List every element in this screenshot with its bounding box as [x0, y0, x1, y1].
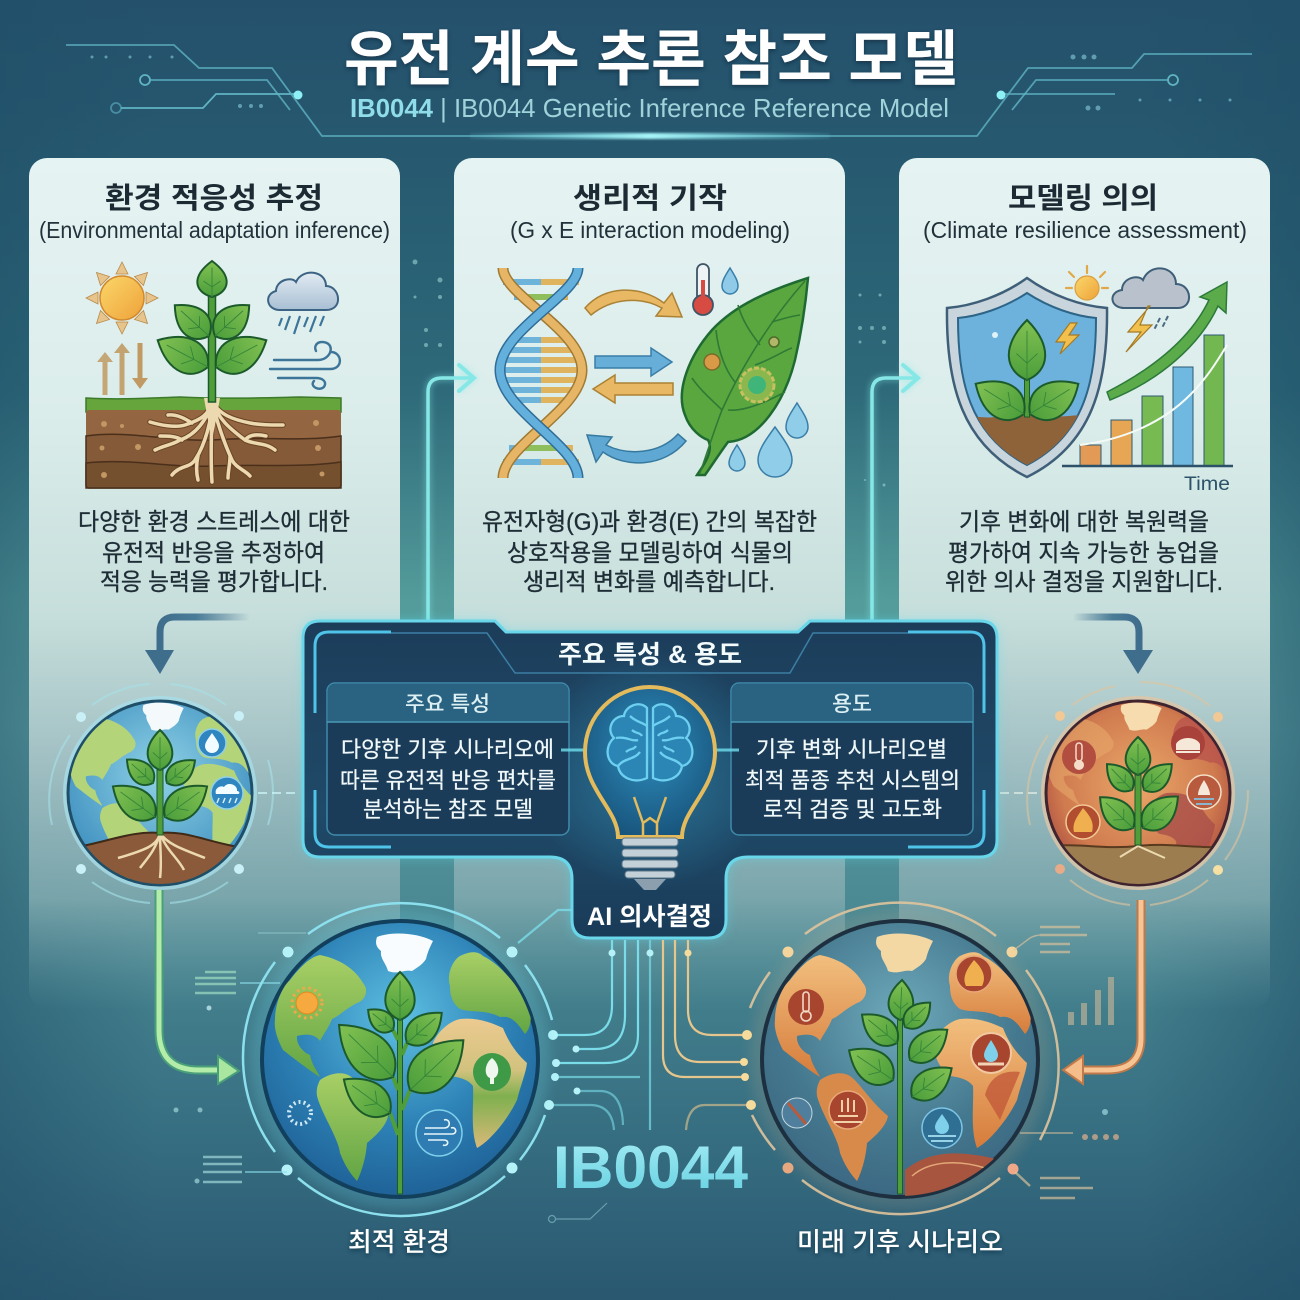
icon: flame badge	[1066, 805, 1100, 839]
body text: modeling significance: 위한 의사 결정을 지원합니다.	[945, 569, 1223, 596]
arrow: core panel up to significance panel	[872, 365, 918, 622]
arrow: right blue	[595, 348, 672, 376]
title: 유전 계수 추론 참조 모델	[344, 26, 958, 93]
decorative side data: optimal globe	[174, 933, 607, 1222]
label: optimal environment: 최적 환경	[348, 1227, 450, 1257]
large globe: future climate	[750, 903, 1059, 1214]
icon: water level badge	[922, 1108, 962, 1148]
arrow: gene to environment curve	[585, 290, 682, 317]
panel heading: environmental adaptation: 환경 적응성 추정	[105, 182, 323, 215]
icon: data dots	[289, 1102, 311, 1124]
icon: water drop badge	[198, 729, 226, 757]
icon: light bulb with brain	[585, 687, 715, 890]
panel subheading: modeling significance: (Climate resilience assessment)	[923, 217, 1247, 243]
body text: environmental adaptation: 유전적 반응을 추정하여	[102, 540, 325, 567]
icon: sun small	[1066, 266, 1108, 300]
icon: drought badge	[1171, 726, 1205, 760]
icon: leaf with pathogen spots	[682, 278, 808, 475]
arrow: adaptation panel down to small globe	[145, 617, 250, 674]
body text: environmental adaptation	[78, 509, 350, 596]
body text: modeling significance	[945, 509, 1223, 596]
icon: flame badge	[956, 956, 992, 992]
box text: use: 최적 품종 추천 시스템의	[745, 768, 960, 793]
box: use	[731, 683, 973, 835]
link: small globe to core panel left	[258, 792, 300, 794]
icon: forest badge	[473, 1053, 511, 1091]
icon: storm cloud	[1112, 268, 1189, 352]
body text: physiological mechanism: 생리적 변화를 예측합니다.	[523, 569, 775, 596]
body text: physiological mechanism: 유전자형(G)과 환경(E) 간의 복잡한	[482, 509, 817, 536]
large globe: optimal environment	[243, 903, 552, 1216]
box text: key features: 분석하는 참조 모델	[363, 797, 533, 822]
icon: flood badge	[1187, 775, 1221, 809]
box text: use: 로직 검증 및 고도화	[763, 797, 942, 822]
decorative data dots	[412, 260, 886, 486]
panel: key features and use	[303, 621, 997, 938]
panel: modeling significance	[899, 158, 1270, 1008]
box text: key features: 다양한 기후 시나리오에	[341, 737, 554, 762]
arrow: rising trend	[1107, 282, 1227, 400]
icon: thermometer	[693, 264, 713, 315]
panel heading: physiological mechanism: 생리적 기작	[573, 182, 727, 215]
body text: environmental adaptation: 적응 능력을 평가합니다.	[100, 569, 328, 596]
body text: environmental adaptation: 다양한 환경 스트레스에 대한	[78, 509, 350, 536]
soil cross-section	[86, 397, 341, 488]
icon: sun	[86, 262, 158, 334]
small globe: baseline environment	[49, 684, 273, 903]
icon: DNA helix	[500, 268, 582, 478]
body text: physiological mechanism	[482, 509, 817, 596]
panel heading: modeling significance: 모델링 의의	[1008, 182, 1158, 215]
arrow: environment to gene curve	[587, 434, 686, 463]
arrow: core panel up to mechanism panel	[428, 365, 474, 622]
box text: use	[745, 737, 960, 822]
icon: rain badge	[211, 777, 243, 809]
icon: wind badge	[416, 1110, 462, 1156]
box heading: key features: 주요 특성	[405, 693, 490, 716]
label: future climate scenario: 미래 기후 시나리오	[797, 1227, 1003, 1257]
body text: modeling significance: 기후 변화에 대한 복원력을	[959, 509, 1209, 536]
icon: thermometer badge	[1062, 740, 1096, 774]
icon: no water badge	[782, 1098, 812, 1128]
icon: sun on globe	[292, 988, 322, 1018]
box text: use: 기후 변화 시나리오별	[756, 737, 947, 762]
bar chart: resilience over time	[1062, 282, 1233, 495]
body text: modeling significance: 평가하여 지속 가능한 농업을	[948, 540, 1219, 567]
header circuit decoration	[66, 45, 1252, 139]
arrow: small green globe link to large globe	[159, 890, 239, 1084]
small globe: stressed environment	[1027, 682, 1248, 905]
panel subheading: environmental adaptation: (Environmental adaptation inference)	[39, 217, 390, 243]
panel subheading: physiological mechanism: (G x E interaction modeling)	[510, 217, 790, 243]
icon: heat badge	[829, 1091, 867, 1129]
decorative side data: future globe	[1014, 927, 1119, 1198]
icon: water drops	[729, 403, 808, 477]
icon: rain cloud	[268, 273, 338, 334]
heading: key features and use: 주요 특성 & 용도	[558, 641, 742, 669]
link: small globe to core panel right	[1000, 792, 1042, 794]
illustration: plant with roots	[150, 261, 283, 482]
arrow: small red globe link to large globe	[1063, 900, 1141, 1084]
label: AI decision: AI 의사결정	[587, 903, 712, 931]
subtitle: IB0044 | IB0044 Genetic Inference Reference Model	[350, 93, 949, 123]
panel: physiological mechanism	[454, 158, 845, 1008]
icon: thermometer badge	[788, 989, 824, 1025]
icon: water drop small	[722, 268, 738, 294]
arrow: left orange	[593, 375, 673, 403]
box heading: use: 용도	[832, 693, 872, 716]
body text: physiological mechanism: 상호작용을 모델링하여 식물의	[507, 540, 793, 567]
box: key features	[327, 683, 569, 835]
circuit lines: cyan to optimal globe	[518, 910, 654, 1130]
axis label: Time	[1184, 474, 1230, 495]
arrow: significance panel down to small globe	[1073, 617, 1153, 674]
box text: key features	[340, 737, 556, 822]
icon: heat arrows	[97, 343, 148, 395]
icon: water scarcity badge	[971, 1033, 1011, 1073]
model code: IB0044	[553, 1134, 749, 1201]
circuit lines: orange to future globe	[663, 940, 756, 1130]
panel: environmental adaptation	[29, 158, 400, 1008]
icon: wind	[270, 342, 340, 389]
icon: shield with plant	[947, 278, 1107, 477]
box text: key features: 따른 유전적 반응 편차를	[340, 768, 556, 793]
